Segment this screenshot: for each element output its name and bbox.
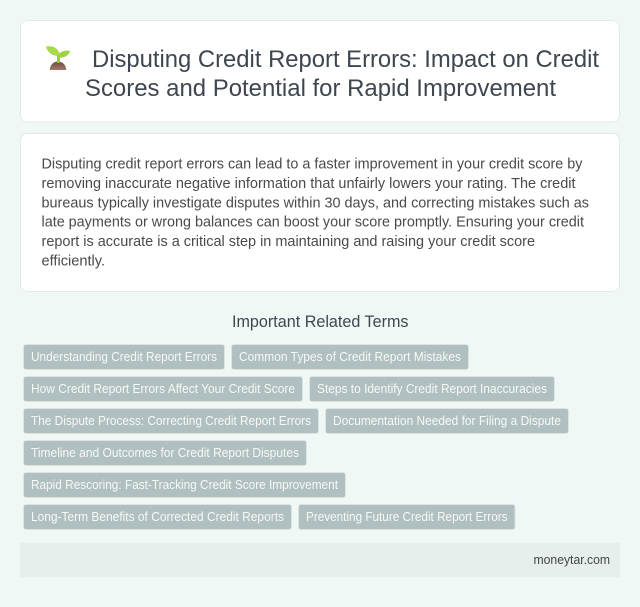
text block: summary: late payments or wrong balances can boost your score promptly. Ensuring your credit	[42, 215, 585, 231]
panel: title card	[20, 20, 620, 122]
tag: how errors affect score	[24, 376, 302, 402]
tag: dispute process: The Dispute Process: Correcting Credit Report Errors	[31, 414, 311, 428]
tag: steps to identify	[310, 376, 554, 402]
tag: long-term benefits: Long-Term Benefits of Corrected Credit Reports	[31, 510, 284, 524]
tag: preventing errors: Preventing Future Credit Report Errors	[306, 510, 508, 524]
tag: understanding errors	[24, 344, 224, 370]
footer	[20, 543, 620, 577]
text block: summary: Disputing credit report errors can lead to a faster improvement in your credit score by	[42, 156, 583, 172]
tag: steps to identify: Steps to Identify Credit Report Inaccuracies	[317, 382, 547, 396]
tag: common mistakes: Common Types of Credit Report Mistakes	[239, 350, 461, 364]
tag: rapid rescoring	[24, 472, 346, 498]
tag: understanding errors: Understanding Credit Report Errors	[31, 350, 217, 364]
tag: rapid rescoring: Rapid Rescoring: Fast-Tracking Credit Score Improvement	[31, 478, 338, 492]
text block: summary: report is accurate is a critical step in maintaining and raising your credit score	[42, 234, 535, 250]
tag: documentation	[326, 408, 568, 434]
text block: summary: removing inaccurate negative information that unfairly lowers your rating. The credit	[42, 176, 576, 192]
tag: long-term benefits	[24, 504, 292, 530]
title: Disputing Credit Report Errors: Impact on Credit	[92, 46, 599, 73]
tag: timeline and outcomes: Timeline and Outcomes for Credit Report Disputes	[31, 446, 299, 460]
title: Scores and Potential for Rapid Improvement	[85, 75, 556, 102]
text block: summary: efficiently.	[42, 253, 105, 269]
tags: related terms	[24, 344, 568, 530]
footer source text: moneytar.com	[534, 552, 610, 567]
tag: dispute process	[24, 408, 318, 434]
tag: timeline and outcomes	[24, 440, 306, 466]
tag: how errors affect score: How Credit Report Errors Affect Your Credit Score	[31, 382, 295, 396]
text block: summary: bureaus typically investigate disputes within 30 days, and correcting mistakes such as	[42, 195, 589, 211]
tag: common mistakes	[232, 344, 468, 370]
heading: related terms: Important Related Terms	[232, 312, 408, 331]
title	[85, 46, 599, 102]
tag: documentation: Documentation Needed for Filing a Dispute	[333, 414, 561, 428]
text block: summary	[42, 156, 589, 269]
icon: seedling	[46, 46, 70, 70]
panel: summary paragraph	[20, 134, 620, 292]
tag: preventing errors	[298, 504, 515, 530]
